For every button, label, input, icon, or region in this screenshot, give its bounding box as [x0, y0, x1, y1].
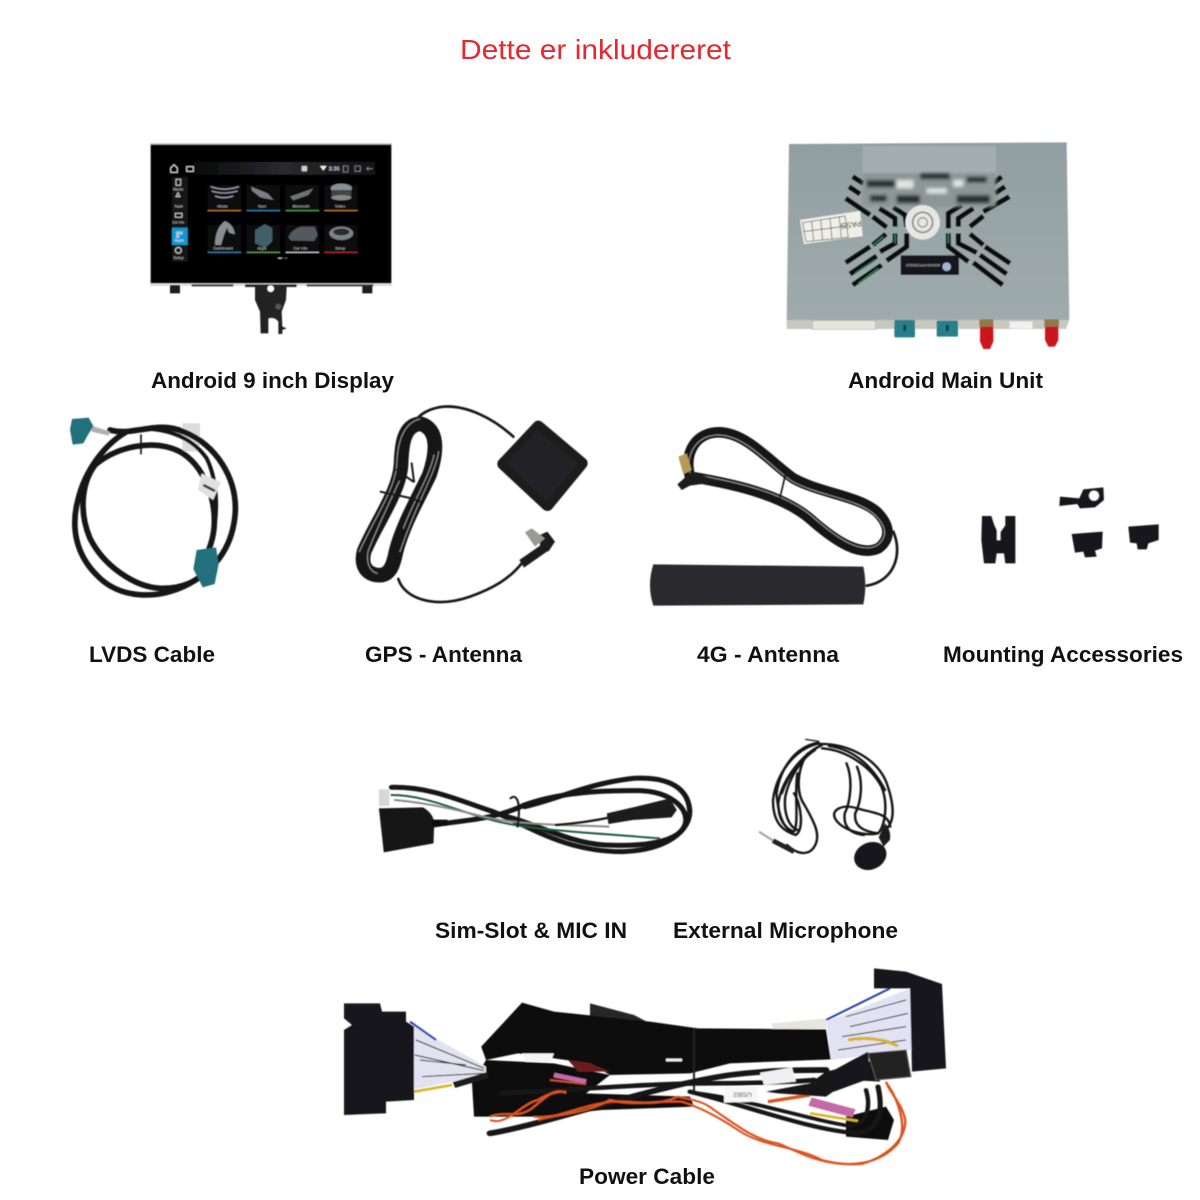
image: display unit: Apps [257, 245, 266, 250]
label: mounting: Mounting Accessories [943, 642, 1183, 667]
image: display unit: Car Info [293, 245, 308, 250]
label: LVDS: LVDS Cable [89, 642, 215, 667]
image: LVDS cable [70, 418, 235, 595]
panel: Android 9 inch Display [150, 143, 395, 393]
image: display unit: Music [217, 204, 228, 209]
panel: Android Main Unit [787, 142, 1069, 393]
panel: LVDS Cable [70, 418, 235, 667]
panel: Mounting Accessories [943, 487, 1183, 667]
image: main unit: PASS [840, 219, 862, 230]
image: display unit [150, 143, 392, 334]
image: display unit: Navi [258, 204, 266, 209]
image: display unit: 3:36 [329, 167, 340, 173]
image: display unit: Video [335, 204, 346, 209]
panel: Sim-Slot & MIC IN [379, 778, 690, 943]
image: 4G antenna [650, 432, 897, 606]
image: display unit: Setup [335, 245, 346, 250]
title: Dette er inkludereret [460, 34, 731, 65]
label: power cable: Power Cable [579, 1164, 715, 1189]
image: mounting clips [981, 487, 1159, 563]
label: display: Android 9 inch Display [151, 368, 395, 393]
image detail: blurred sticker [863, 173, 996, 207]
image: main unit: A00X00-FPC0D3110 [906, 263, 940, 267]
label: microphone: External Microphone [673, 918, 898, 943]
panel: Power Cable [344, 968, 946, 1189]
image: GPS antenna [359, 407, 582, 602]
label: 4G: 4G - Antenna [697, 642, 840, 667]
image: main unit [787, 142, 1069, 349]
image: display unit: Dashboard [213, 245, 233, 250]
label: main unit: Android Main Unit [848, 368, 1044, 393]
label: GPS: GPS - Antenna [365, 642, 523, 667]
panel: 4G - Antenna [650, 432, 897, 667]
image: display unit: Navi [175, 204, 183, 209]
image: display unit: Setup [173, 255, 185, 260]
image: display unit: Music [173, 186, 183, 191]
image: power harness: USB2 [733, 1091, 752, 1097]
image: display unit: Apps [175, 237, 184, 242]
image: display unit: Car Info [172, 221, 184, 225]
image: sim-slot cable [379, 778, 690, 852]
image: external microphone [759, 739, 893, 876]
panel: External Microphone [673, 739, 898, 943]
image: display unit: Bluetooth [293, 204, 310, 209]
label: sim-slot: Sim-Slot & MIC IN [435, 918, 627, 943]
panel: GPS - Antenna [359, 407, 582, 667]
image: power harness [344, 968, 946, 1164]
